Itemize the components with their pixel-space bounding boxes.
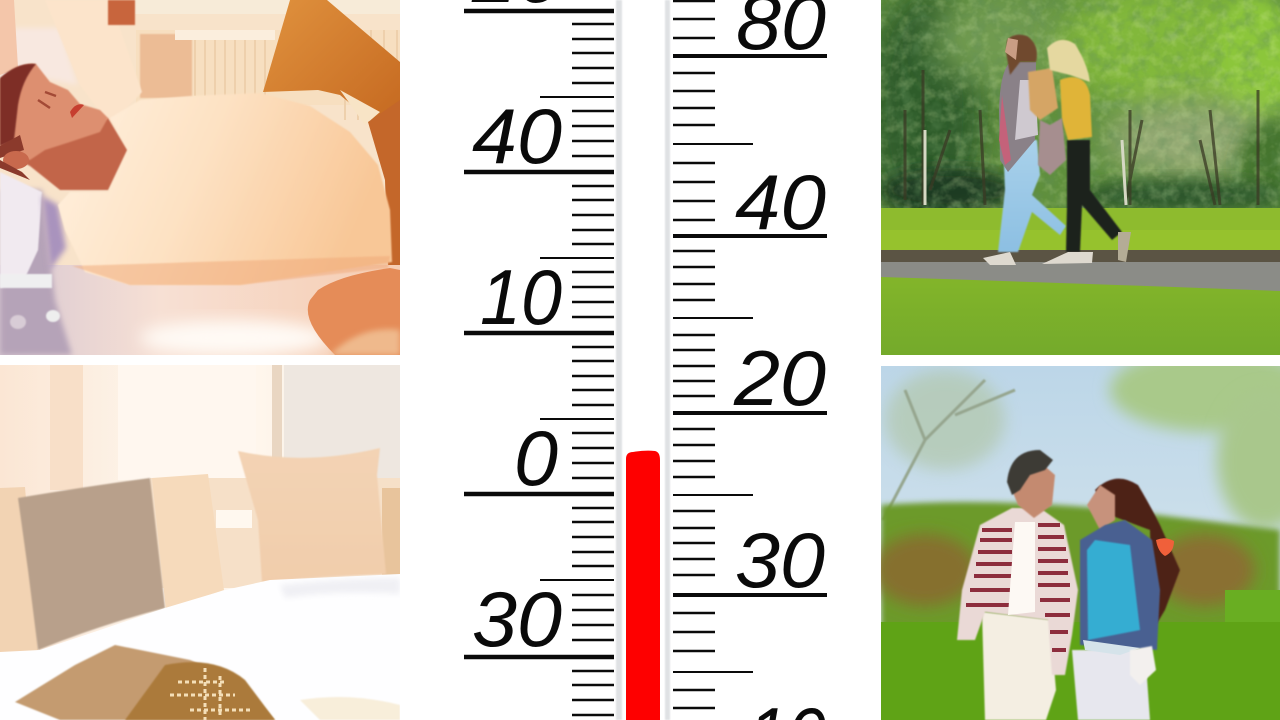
- undershirt: [1008, 522, 1035, 615]
- right pillow: [238, 448, 386, 582]
- left scale numbers: 40: [472, 92, 562, 180]
- lower lawn: [881, 270, 1280, 355]
- orange knee at lower right: [308, 268, 400, 355]
- raised arm: [58, 28, 142, 97]
- orange heart accessory: [1156, 538, 1174, 556]
- right scale ticks: [673, 1, 827, 708]
- distant hill and hedge: [881, 502, 1280, 630]
- right scale numbers: [733, 0, 826, 720]
- cream pillow: [152, 474, 224, 610]
- side of grey cushion: [0, 487, 38, 660]
- left scale ticks: [464, 11, 614, 715]
- left scale numbers: [471, 0, 562, 663]
- grey pillow: [18, 478, 165, 650]
- radiator behind the man: [136, 30, 400, 120]
- thermometer: [464, 0, 827, 720]
- floor: [0, 265, 400, 355]
- white sweater: [58, 93, 392, 285]
- man in plaid shirt: [957, 450, 1078, 720]
- orange raised leg: [263, 0, 400, 120]
- man's head: [0, 64, 127, 190]
- red mercury column: [626, 451, 660, 720]
- left scale numbers: 10: [480, 253, 562, 341]
- tree foliage: [881, 0, 1280, 208]
- upper lawn: [881, 208, 1280, 252]
- photo panel: bright bedroom with pillows: [0, 365, 400, 720]
- white trousers: [982, 612, 1056, 720]
- right scale numbers: 40: [735, 158, 826, 246]
- left scale numbers: 0: [514, 414, 558, 502]
- window sill: [150, 478, 400, 588]
- tube walls: [616, 0, 670, 720]
- photo panel: couple walking in a green park: [865, 0, 1280, 355]
- photo panel: couple smiling on a meadow: [873, 348, 1280, 720]
- walker in blue jeans: [983, 35, 1066, 265]
- bedding at lower left: [0, 190, 72, 355]
- pillow behind the head: [0, 28, 78, 90]
- headboard: [382, 488, 400, 578]
- knitted blanket: [15, 645, 275, 720]
- blurred trees: [883, 348, 1280, 530]
- walker in yellow jacket: [1028, 40, 1131, 264]
- white duvet: [0, 574, 400, 720]
- head: [1012, 462, 1055, 518]
- foreground grass: [881, 622, 1280, 720]
- kerb: [881, 250, 1280, 262]
- woman in blue top: [1072, 479, 1180, 720]
- right scale numbers: 30: [735, 516, 825, 604]
- left scale numbers: 30: [472, 575, 562, 663]
- right scale numbers: 20: [733, 334, 826, 422]
- photo panel: man lying on a bed in warm light: [0, 0, 400, 356]
- path: [881, 262, 1280, 291]
